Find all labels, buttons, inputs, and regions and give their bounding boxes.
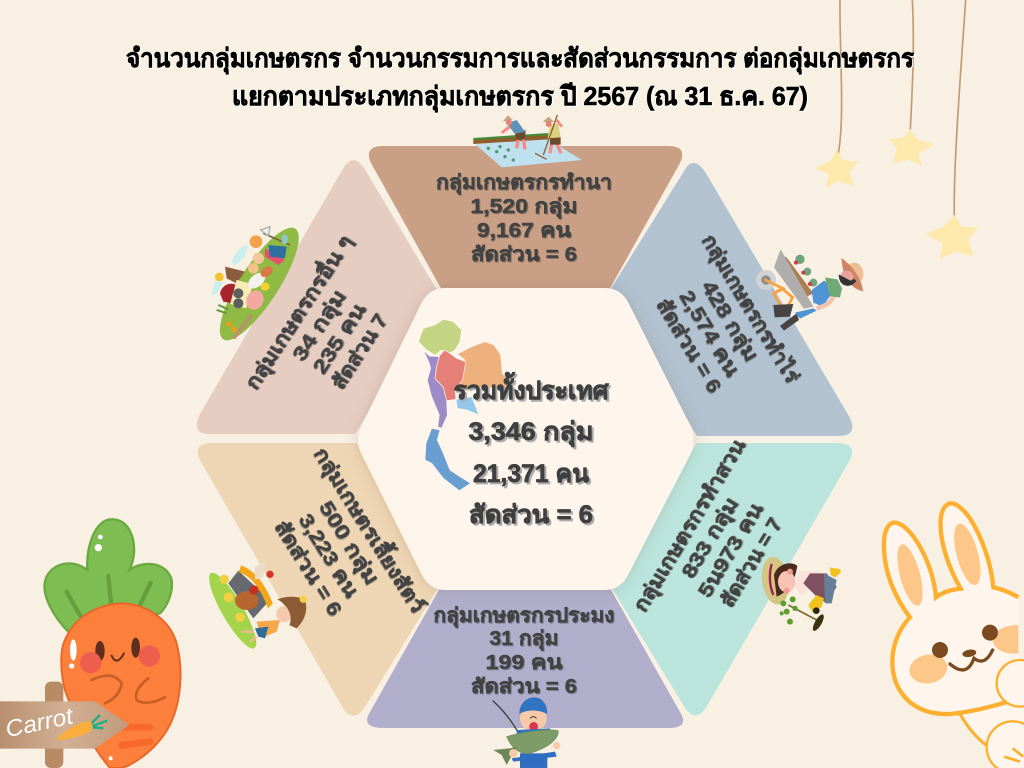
panel: rice farmers xyxy=(369,146,682,292)
panel: upland farmers: สัดส่วน = 6 xyxy=(652,295,725,397)
panel: fishery farmers xyxy=(367,588,683,728)
panel: fishery farmers: 199 คน xyxy=(486,652,563,674)
panel: livestock farmers: 3,223 คน xyxy=(294,510,362,602)
national total text: 21,371 คน xyxy=(473,460,589,488)
panel: rice farmers: 1,520 กลุ่ม xyxy=(470,196,578,219)
icon: fisherman holding fish xyxy=(493,697,560,768)
icon: farmer with wheelbarrow xyxy=(756,249,863,331)
panel: orchard farmers xyxy=(610,436,852,716)
panel: rice farmers: สัดส่วน = 6 xyxy=(471,244,577,266)
hanging stars xyxy=(814,0,978,259)
national total text: สัดส่วน = 6 xyxy=(469,501,593,529)
panel: other farmers: 34 กลุ่ม xyxy=(289,286,352,366)
map of Thailand xyxy=(418,319,507,491)
panel: livestock farmers: สัดส่วน = 6 xyxy=(270,517,346,620)
title xyxy=(126,43,914,113)
icon: rice farmers in paddy xyxy=(473,115,582,167)
panel: fishery farmers: กลุ่มเกษตรกรประมง xyxy=(434,605,614,628)
panel: livestock farmers xyxy=(198,441,440,716)
national total text xyxy=(454,371,610,529)
panel: national total hexagon xyxy=(358,288,694,590)
panel: rice farmers: 9,167 คน xyxy=(477,220,571,242)
title: แยกตามประเภทกลุ่มเกษตรกร ปี 2567 (ณ 31 ธ.ค. 67) xyxy=(232,81,808,113)
panel: orchard farmers: สัดส่วน = 7 xyxy=(717,515,787,612)
panel: other farmers: สัดส่วน 7 xyxy=(328,311,392,394)
panel: upland farmers: กลุ่มเกษตรกรทำไร่ xyxy=(696,230,805,388)
panel: fishery farmers: 31 กลุ่ม xyxy=(490,628,558,651)
icon: chicken farmer xyxy=(202,562,307,654)
panel: livestock farmers: 500 กลุ่ม xyxy=(313,497,383,589)
panel: other farmers: กลุ่มเกษตรกรอื่น ๆ xyxy=(237,229,358,395)
panel: orchard farmers: 833 กลุ่ม xyxy=(678,494,744,583)
national total text: รวมทั้งประเทศ xyxy=(454,371,610,405)
icon: carrot character with sign xyxy=(0,519,181,768)
panel: livestock farmers: กลุ่มเกษตรเลี้ยงสัตว์ xyxy=(308,441,433,617)
icon: gardener planting tree xyxy=(759,555,841,632)
panel: orchard farmers: กลุ่มเกษตรกรทำสวน xyxy=(630,436,751,617)
panel: upland farmers: 428 กลุ่ม xyxy=(696,277,762,366)
panel: rice farmers: กลุ่มเกษตรกรทำนา xyxy=(436,172,612,195)
panel: orchard farmers: 5น973 คน xyxy=(694,499,768,602)
panel: other farmers: 235 คน xyxy=(309,300,371,378)
title: จำนวนกลุ่มเกษตรกร จำนวนกรรมการและสัดส่วนกรรมการ ต่อกลุ่มเกษตรกร xyxy=(126,43,914,75)
icon: farm family scene xyxy=(207,218,311,350)
panel: upland farmers xyxy=(610,163,852,436)
panel: fishery farmers: สัดส่วน = 6 xyxy=(471,676,577,698)
sign label: Carrot xyxy=(3,702,77,742)
panel: other farmers xyxy=(197,160,440,434)
national total text: 3,346 กลุ่ม xyxy=(468,418,594,448)
icon: rabbit character xyxy=(884,503,1024,768)
panel: upland farmers: 2,574 คน xyxy=(675,287,743,381)
